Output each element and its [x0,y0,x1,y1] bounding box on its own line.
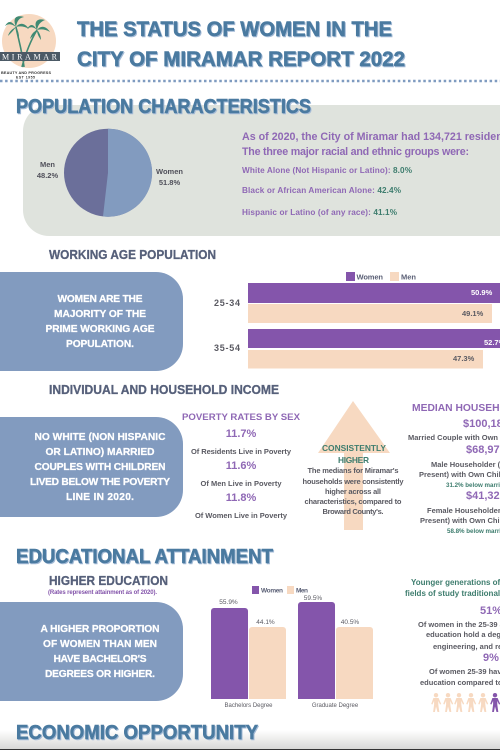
callout: working age: PRIME WORKING AGE [46,324,155,335]
poverty rates by sex: Of Men Live in Poverty [200,479,282,488]
poverty rates by sex [182,412,301,520]
poverty rates by sex: 11.8% [226,492,257,504]
bar chart: working age: 47.3% [453,354,475,363]
panel: population characteristics [23,105,500,236]
arrow: consistently higher: HIGHER [338,455,369,465]
population text: The three major racial and ethnic groups were: [242,146,469,158]
legend: Men [401,272,416,282]
bar chart: working age: 25-34 [214,298,240,308]
legend: Women [261,588,283,594]
pie chart: 48.2% [37,171,58,180]
arrow: consistently higher: The medians for Miramar's [308,466,398,475]
bar chart: working age: 35-54 [214,343,240,353]
callout: poverty: LIVED BELOW THE POVERTY [30,477,170,488]
callout: higher education: OF WOMEN THAN MEN [43,639,157,650]
heading: individual and household income: INDIVIDUAL AND HOUSEHOLD INCOME [49,382,279,397]
callout: working age: MAJORITY OF THE [54,309,146,320]
poverty rates by sex: POVERTY RATES BY SEX [182,412,301,423]
callout: poverty: LINE IN 2020. [66,492,134,503]
median household income: $68,97 [466,444,500,456]
arrow: consistently higher: characteristics, compared to [304,497,402,506]
bar chart: higher education: 55.9% [219,599,238,606]
heading: population characteristics: POPULATION CHARACTERISTICS [16,96,311,118]
population text: White Alone (Not Hispanic or Latino): 8.0% [242,166,413,175]
heading: economic opportunity: ECONOMIC OPPORTUNITY [16,722,259,744]
bar chart: working age: 49.1% [462,309,484,318]
callout: working age: POPULATION. [66,339,134,350]
title: CITY OF MIRAMAR REPORT 2022 [77,48,405,71]
icon: people [431,693,500,712]
logo: EST 1955 [16,76,35,80]
callout: working age [0,272,183,371]
pie chart: Women [156,167,183,176]
arrow: consistently higher: households were consistently [302,477,404,486]
bar chart: higher education [211,586,373,709]
callout: poverty: COUPLES WITH CHILDREN [34,462,166,473]
callout: higher education [0,602,183,701]
callout: poverty [0,417,183,517]
median household income: $41,32 [466,490,500,502]
younger generations text: 9% [483,652,499,664]
logo [0,14,60,80]
population text: Black or African American Alone: 42.4% [242,186,402,195]
logo: BEAUTY AND PROGRESS [1,71,51,75]
pie chart [37,129,183,217]
logo banner: MIRAMAR [2,52,58,62]
arrow: consistently higher: CONSISTENTLY [322,443,386,453]
callout: poverty: OR LATINO) MARRIED [46,447,154,458]
callout: higher education: DEGREES OR HIGHER. [45,669,155,680]
bar chart: higher education: 44.1% [256,619,275,626]
heading: higher education [48,573,168,596]
population text: Hispanic or Latino (of any race): 41.1% [242,208,398,217]
legend [346,272,416,282]
population text [242,131,500,217]
heading: higher education: HIGHER EDUCATION [49,573,168,588]
arrow: consistently higher: higher across all [325,487,381,496]
callout: higher education: HAVE BACHELOR'S [54,654,147,665]
legend: Men [296,588,308,594]
legend [252,586,308,594]
poverty rates by sex: Of Residents Live in Poverty [191,447,292,456]
pie chart: 51.8% [159,178,180,187]
arrow: consistently higher: Broward County's. [322,507,384,516]
heading: working age population: WORKING AGE POPULATION [49,247,216,262]
bar chart: working age: 50.9% [471,288,493,297]
callout: working age: WOMEN ARE THE [58,294,143,305]
bar chart: higher education: Bachelors Degree [224,703,273,709]
younger generations text [405,578,500,687]
poverty rates by sex: Of Women Live in Poverty [195,511,288,520]
arrow: consistently higher [302,401,404,530]
bar chart: working age [214,272,500,368]
bar chart: higher education: 40.5% [341,619,359,626]
callout: higher education: A HIGHER PROPORTION [40,624,160,635]
pie chart: Men [40,160,55,169]
legend: Women [356,272,383,282]
poverty rates by sex: 11.7% [226,428,257,440]
heading: higher education: (Rates represent attainment as of 2020). [48,590,157,596]
bar chart: higher education: Graduate Degree [312,703,359,709]
poverty rates by sex: 11.6% [226,460,257,472]
title [77,18,405,71]
title: THE STATUS OF WOMEN IN THE [77,18,392,41]
heading: educational attainment: EDUCATIONAL ATTAINMENT [16,546,273,568]
bar chart: higher education: 59.5% [304,595,322,602]
median household income [408,403,500,535]
callout: poverty: NO WHITE (NON HISPANIC [34,432,166,443]
